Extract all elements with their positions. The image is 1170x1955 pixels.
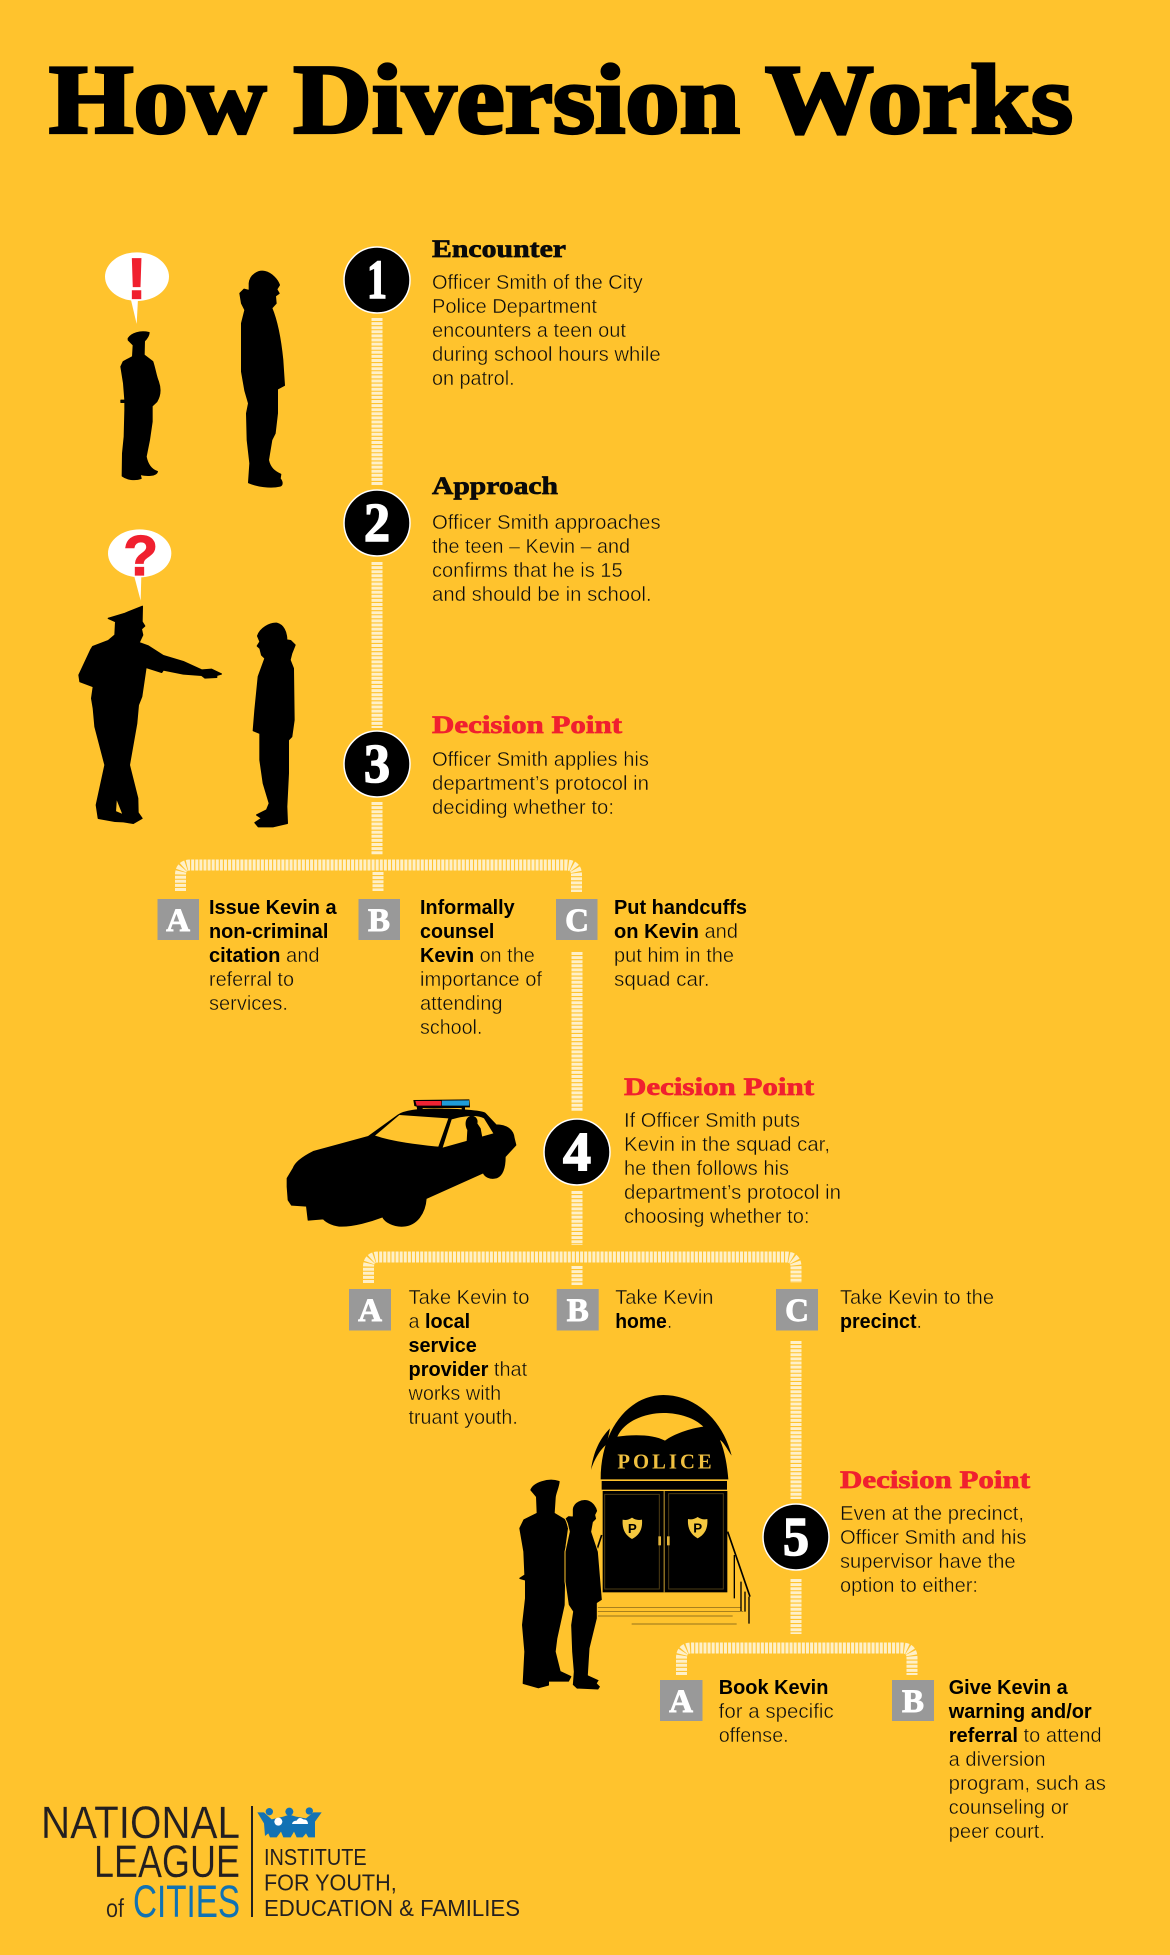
illustration: officer pointing at teen with question bubble [79, 525, 295, 827]
building: doors: P [693, 1520, 702, 1535]
speech bubble: exclamation: ! [127, 248, 146, 312]
step 3 text: Decision Point: department’s protocol in [432, 773, 649, 795]
logo text: Institute for Youth, Education and Families [264, 1844, 520, 1921]
logo icon: children with raised arms [257, 1807, 322, 1837]
option 3C: squad car. [614, 969, 710, 991]
option 4A: provider that [408, 1359, 528, 1381]
speech bubble: question: ? [123, 525, 158, 588]
connector: line from option C to step 4 and second bracket [368, 952, 796, 1285]
step 1 text: Encounter [432, 236, 661, 390]
building: doors [602, 1481, 727, 1592]
step 5 text: Decision Point: Decision Point [840, 1467, 1031, 1494]
option 3B: Informally [420, 897, 515, 919]
step 1 text: Encounter: Officer Smith of the City [432, 272, 643, 294]
step 4 number: 4 [563, 1121, 591, 1182]
step 3 text: Decision Point: Officer Smith applies his [432, 749, 649, 771]
option 4A: Take Kevin to [408, 1287, 530, 1309]
option 4B: B [567, 1293, 589, 1329]
step 3 text: Decision Point: Decision Point [432, 712, 623, 739]
option 4B: home. [615, 1311, 672, 1333]
option 4A [349, 1287, 530, 1429]
step 5 text: Decision Point: Officer Smith and his [840, 1527, 1026, 1549]
step 2 number [344, 490, 410, 556]
option 4A: A [358, 1293, 382, 1329]
option 3B: B [368, 903, 390, 939]
step 4 text: Decision Point: If Officer Smith puts [624, 1110, 800, 1132]
option 4A: works with [408, 1383, 501, 1405]
step 2 text: Approach [432, 473, 661, 606]
logo text: Institute for Youth, Education and Families: INSTITUTE [264, 1844, 367, 1870]
step 2 text: Approach: Approach [432, 473, 558, 500]
connector: main vertical line steps 1 to 3 [372, 318, 382, 855]
option 4C: precinct. [840, 1311, 922, 1333]
title: How Diversion Works [49, 46, 1073, 154]
step 5 text: Decision Point: option to either: [840, 1575, 978, 1597]
logo: National League of Cities: of [106, 1893, 125, 1923]
step 1 number: 1 [367, 249, 387, 310]
step 5 number: 5 [783, 1506, 809, 1567]
option 5B: counseling or [949, 1797, 1069, 1819]
option 5B: a diversion [949, 1749, 1046, 1771]
option 3C: put him in the [614, 945, 734, 967]
building: arch [591, 1395, 732, 1479]
step 3 number [344, 731, 410, 797]
option 5B: warning and/or [948, 1701, 1092, 1723]
option 3C: C [565, 903, 589, 939]
step 5 text: Decision Point [840, 1467, 1031, 1597]
silhouette: teen at station [565, 1500, 602, 1690]
logo: National League of Cities [41, 1797, 240, 1927]
option 5B [892, 1677, 1106, 1843]
speech bubble: question [108, 525, 171, 601]
logo: National League of Cities: LEAGUE [94, 1836, 240, 1887]
step 4 number [544, 1119, 610, 1185]
step 1 number [344, 247, 410, 313]
option 4A: service [408, 1335, 477, 1357]
option 3B: school. [420, 1017, 482, 1039]
step 5 number [763, 1504, 829, 1570]
option 3A: referral to [209, 969, 294, 991]
step 2 text: Approach: Officer Smith approaches [432, 512, 661, 534]
option 3A: Issue Kevin a [209, 897, 337, 919]
option 4A: a local [408, 1311, 470, 1333]
option 5B: B [902, 1684, 924, 1720]
option 3C [556, 897, 747, 991]
building: doors: P [628, 1521, 637, 1536]
silhouette: pointing officer [79, 606, 221, 823]
step 1 text: Encounter: during school hours while [432, 344, 661, 366]
option 5B: program, such as [949, 1773, 1106, 1795]
option 5A: offense. [719, 1725, 789, 1747]
step 5 text: Decision Point: supervisor have the [840, 1551, 1016, 1573]
logo text: Institute for Youth, Education and Families: EDUCATION & FAMILIES [264, 1895, 520, 1921]
silhouette: teen [240, 271, 284, 487]
step 4 text: Decision Point: choosing whether to: [624, 1206, 810, 1228]
building: railing and steps [597, 1532, 750, 1624]
step 2 text: Approach: confirms that he is 15 [432, 560, 623, 582]
illustration: police station with officer and teen [520, 1395, 750, 1690]
option 3C: Put handcuffs [614, 897, 747, 919]
connector: first decision bracket [180, 865, 576, 892]
step 4 text: Decision Point: Decision Point [624, 1074, 815, 1101]
step 3 number: 3 [364, 733, 390, 794]
step 4 text: Decision Point: Kevin in the squad car, [624, 1134, 830, 1156]
option 5A: Book Kevin [719, 1677, 828, 1699]
step 1 text: Encounter: encounters a teen out [432, 320, 626, 342]
option 5A: A [669, 1684, 693, 1720]
step 3 text: Decision Point [432, 712, 649, 819]
illustration: police car [287, 1099, 516, 1226]
option 5B: referral to attend [949, 1725, 1102, 1747]
option 3A: services. [209, 993, 288, 1015]
logo divider [251, 1806, 253, 1917]
connector: line from option C to step 5 and third bracket [682, 1341, 912, 1675]
option 5B: Give Kevin a [949, 1677, 1069, 1699]
option 4B: Take Kevin [615, 1287, 714, 1309]
option 5A: for a specific [719, 1701, 834, 1723]
option 4A: truant youth. [408, 1407, 518, 1429]
option 4C: C [785, 1293, 809, 1329]
option 3A: citation and [209, 945, 320, 967]
illustration: officer and teen with exclamation bubble [105, 248, 284, 487]
option 5A [660, 1677, 834, 1747]
option 3C: on Kevin and [614, 921, 738, 943]
option 4C: Take Kevin to the [840, 1287, 994, 1309]
option 3A: non-criminal [209, 921, 328, 943]
step 4 text: Decision Point: he then follows his [624, 1158, 789, 1180]
silhouette: officer [121, 332, 160, 480]
step 5 text: Decision Point: Even at the precinct, [840, 1503, 1024, 1525]
option 5B: peer court. [949, 1821, 1045, 1843]
step 1 text: Encounter: on patrol. [432, 368, 515, 390]
logo: National League of Cities: CITIES [133, 1876, 240, 1927]
option 4C [776, 1287, 994, 1333]
logo text: Institute for Youth, Education and Families: FOR YOUTH, [264, 1870, 397, 1896]
step 2 number: 2 [364, 492, 390, 553]
option 3B: counsel [420, 921, 494, 943]
step 3 text: Decision Point: deciding whether to: [432, 797, 614, 819]
logo: National League of Cities: NATIONAL [41, 1797, 240, 1848]
silhouette: teen facing officer [253, 623, 295, 827]
silhouette: officer at station [520, 1480, 571, 1688]
building: arch: POLICE [617, 1451, 712, 1473]
option 3B: Kevin on the [420, 945, 535, 967]
step 4 text: Decision Point: department’s protocol in [624, 1182, 841, 1204]
option 3A: A [166, 903, 190, 939]
option 3B [358, 897, 542, 1039]
step 2 text: Approach: the teen – Kevin – and [432, 536, 630, 558]
option 4B [557, 1287, 714, 1333]
step 1 text: Encounter: Encounter [432, 236, 566, 263]
step 1 text: Encounter: Police Department [432, 296, 597, 318]
step 2 text: Approach: and should be in school. [432, 584, 652, 606]
option 3A [158, 897, 337, 1015]
speech bubble: exclamation [105, 248, 169, 324]
option 3B: attending [420, 993, 503, 1015]
option 3B: importance of [420, 969, 542, 991]
step 4 text: Decision Point [624, 1074, 841, 1228]
